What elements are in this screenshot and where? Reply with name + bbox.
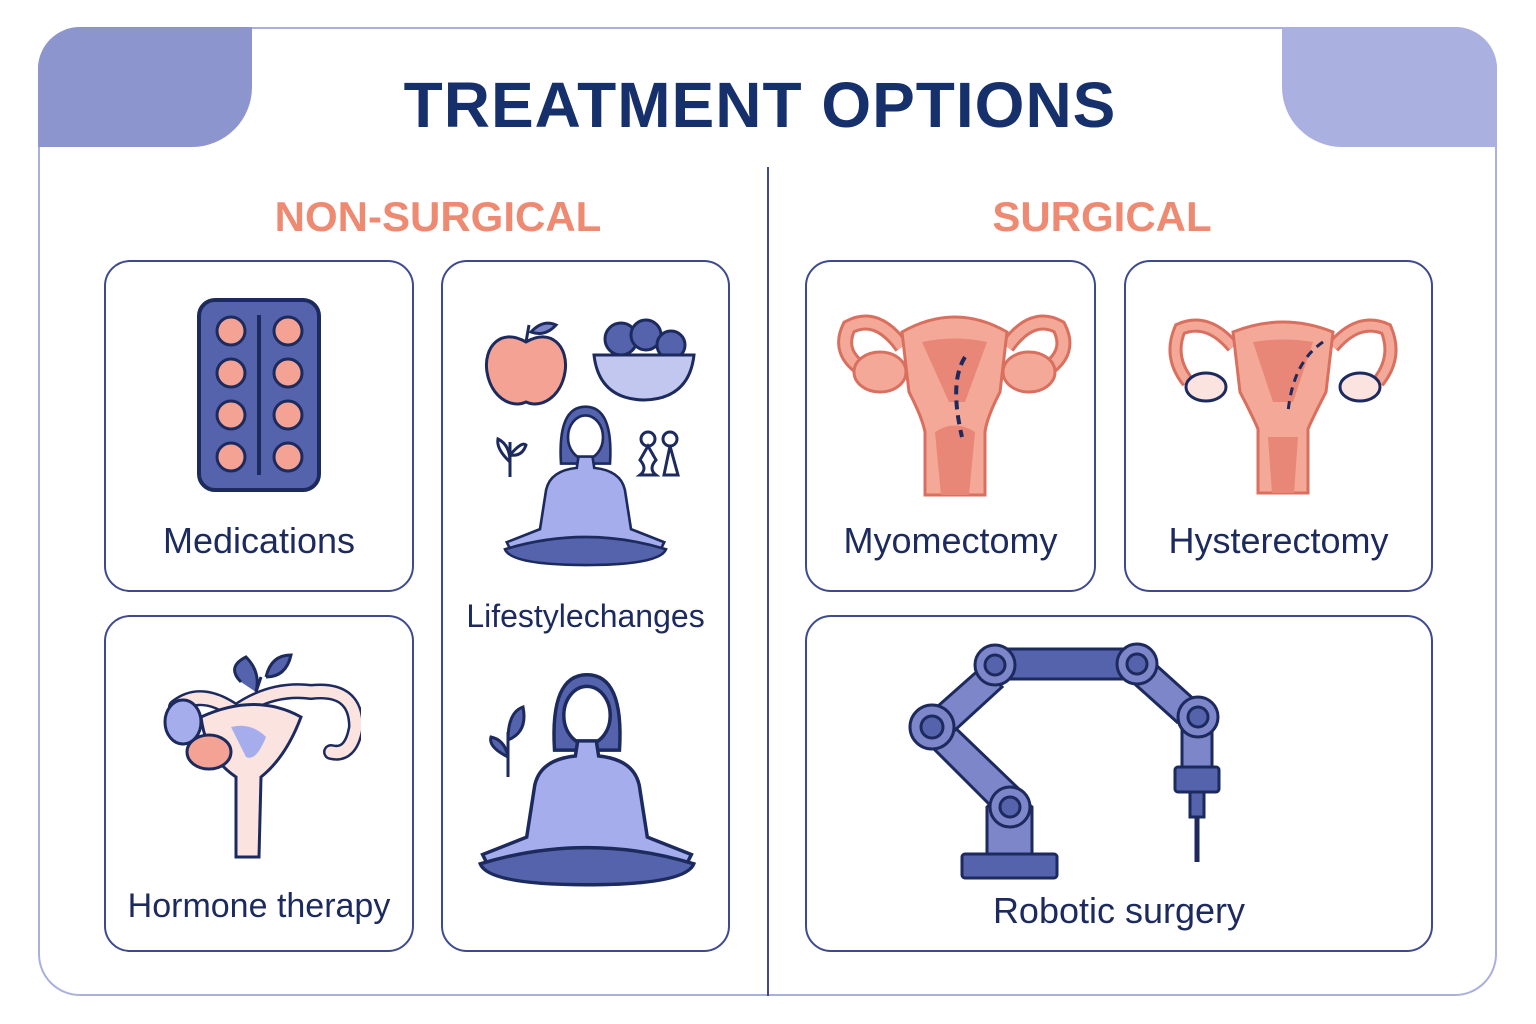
label: myomectomy: Myomectomy (843, 520, 1058, 561)
panel: medications (104, 260, 414, 592)
label: robotic surgery: Robotic surgery (993, 890, 1245, 931)
icon: robotic arm (908, 642, 1220, 880)
label: medications: Medications (163, 520, 355, 561)
icon: uterus with leaves (164, 654, 361, 858)
label: hysterectomy: Hysterectomy (1168, 520, 1389, 561)
icon: meditating person bottom (478, 673, 696, 886)
icon: uterus with incision (837, 314, 1072, 496)
tab: top-right (1282, 27, 1497, 147)
panel: lifestyle changes (441, 260, 730, 952)
heading: surgical: SURGICAL (992, 193, 1212, 240)
title: TREATMENT OPTIONS (404, 69, 1116, 141)
icon: uterus with incision (1168, 318, 1398, 494)
icon: pill blister (197, 298, 321, 492)
panel: hysterectomy (1124, 260, 1433, 592)
panel: hormone therapy (104, 615, 414, 952)
icon: apple and bowl (484, 318, 696, 406)
panel: myomectomy (805, 260, 1096, 592)
heading: non-surgical: NON-SURGICAL (275, 193, 601, 240)
panel: robotic surgery (805, 615, 1433, 952)
icon: sprout and figures (496, 430, 680, 477)
icon: sprout bottom (489, 705, 526, 777)
icon: meditating person top (503, 405, 668, 566)
label: hormone therapy: Hormone therapy (128, 887, 390, 925)
label: lifestyle changes: Lifestylechanges (466, 598, 705, 634)
tab: top-left (38, 27, 252, 147)
